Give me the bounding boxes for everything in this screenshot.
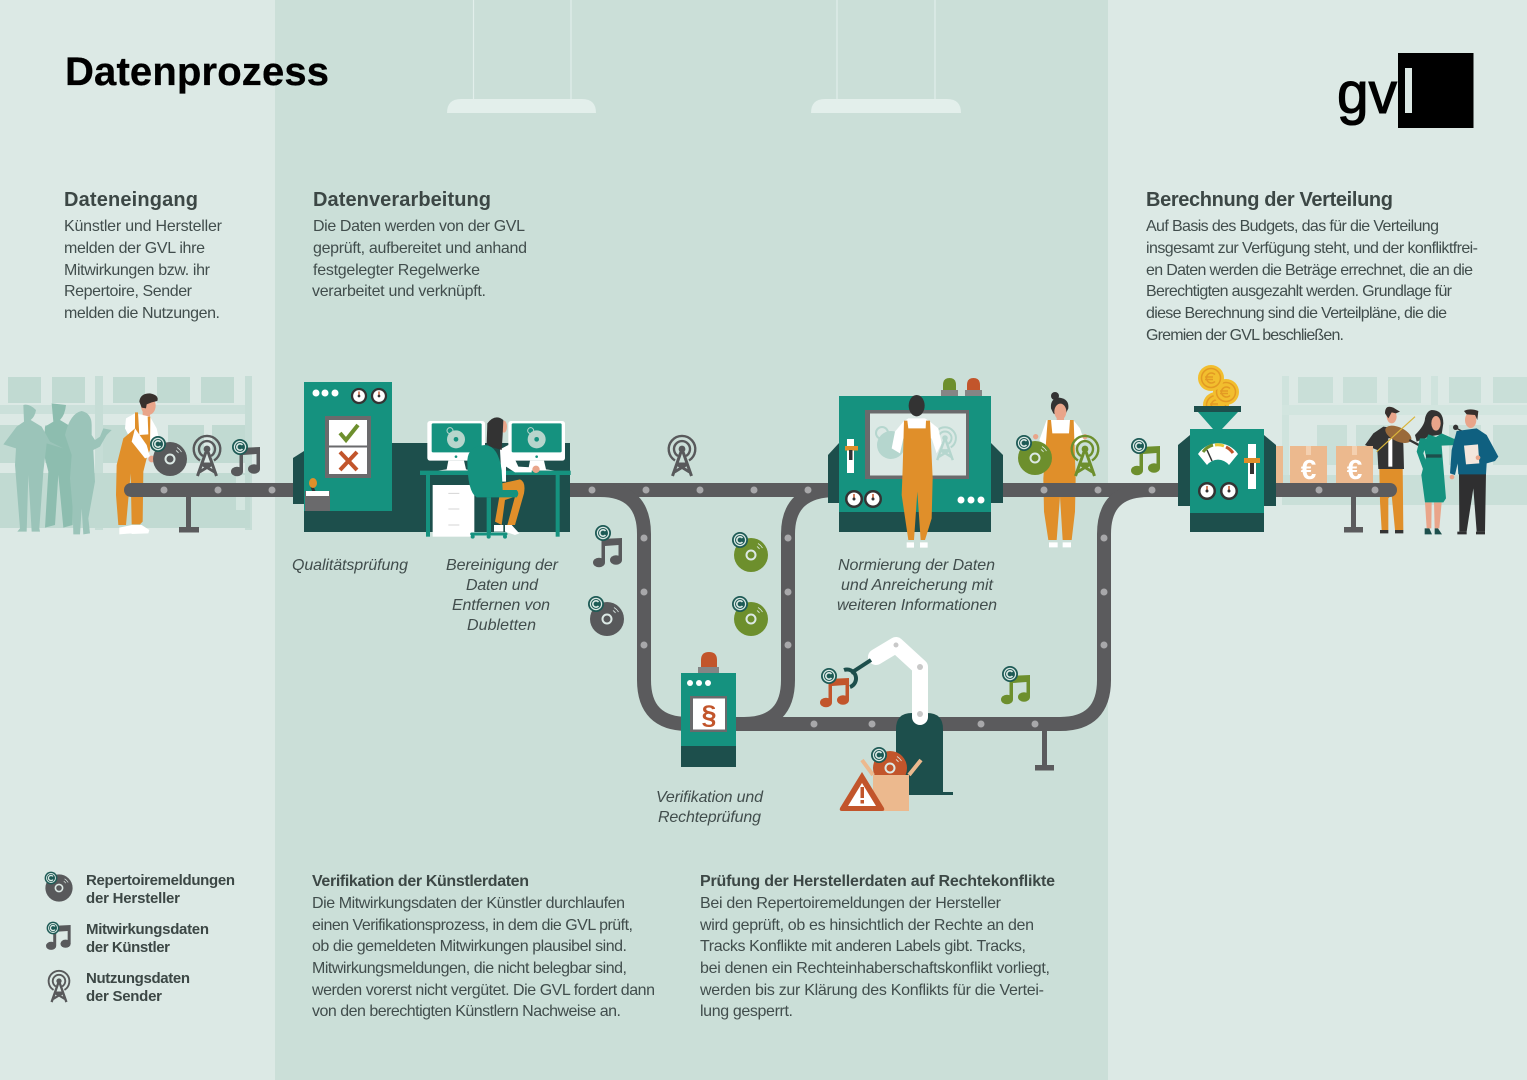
icon: CD on belt xyxy=(150,436,187,476)
legend item: Repertoiremeldungen xyxy=(45,872,235,907)
text block: Berechnung der Verteilung: Gremien der GVL beschließen. xyxy=(1146,327,1344,344)
legend item: Mitwirkungsdaten xyxy=(46,921,209,956)
icon: note on belt xyxy=(231,439,260,476)
artists silhouettes xyxy=(3,403,112,534)
text block: Dateneingang: melden die Nutzungen. xyxy=(64,305,220,322)
text block: Berechnung der Verteilung: en Daten werden die Beträge errechnet, die an die xyxy=(1146,262,1473,279)
text block: Verifikation der Künstlerdaten: von den berechtigten Künstlern Nachweise an. xyxy=(312,1003,621,1020)
background: central process hall xyxy=(275,0,1108,1080)
text block: Prüfung der Herstellerdaten: Tracks Konflikte mit anderen Labels gibt. Tracks, xyxy=(700,938,1026,955)
text block: Berechnung der Verteilung: Berechtigten ausgezahlt werden. Grundlage für xyxy=(1146,283,1453,300)
text block: Verifikation der Künstlerdaten: werden vorerst nicht vergütet. Die GVL fordert dann xyxy=(311,982,655,999)
label: Bereinigung: Dubletten xyxy=(467,617,536,634)
text block: Dateneingang: Dateneingang xyxy=(64,189,198,211)
euro boxes on belt: € xyxy=(1347,454,1363,485)
text block: Prüfung der Herstellerdaten: Prüfung der Herstellerdaten auf Rechtekonflikte xyxy=(700,873,1055,890)
warehouse shelves left xyxy=(0,376,252,530)
label: Normierung: Normierung der Daten xyxy=(838,557,995,574)
logo gvl: gv xyxy=(1337,61,1397,126)
conveyor rollers xyxy=(160,486,1378,728)
legend item: Mitwirkungsdaten: der Künstler xyxy=(86,939,170,956)
operator at normalisation machine xyxy=(892,395,942,548)
text block: Verifikation der Künstlerdaten xyxy=(311,873,655,1020)
payout machine with coins xyxy=(1178,365,1276,532)
icon: green note xyxy=(1131,438,1160,475)
text block: Datenverarbeitung: Datenverarbeitung xyxy=(313,189,491,211)
text block: Verifikation der Künstlerdaten: ob die gemeldeten Mitwirkungen plausibel sind. xyxy=(312,938,627,955)
man with clipboard xyxy=(1450,409,1498,534)
label: Bereinigung: Bereinigung der xyxy=(446,557,559,574)
logo gvl xyxy=(1337,53,1474,128)
label: Bereinigung: Entfernen von xyxy=(452,597,550,614)
text block: Datenverarbeitung xyxy=(312,189,527,300)
text block: Verifikation der Künstlerdaten: Verifikation der Künstlerdaten xyxy=(312,873,529,890)
robot arm xyxy=(844,642,953,795)
conveyor belt network xyxy=(131,490,1390,724)
label: Bereinigung xyxy=(446,557,559,634)
text block: Verifikation der Künstlerdaten: Die Mitwirkungsdaten der Künstler durchlaufen xyxy=(312,895,625,912)
text block: Datenverarbeitung: geprüft, aufbereitet und anhand xyxy=(313,240,527,257)
icon: tower on belt xyxy=(194,436,220,476)
legend item: Mitwirkungsdaten: Mitwirkungsdaten xyxy=(86,921,209,938)
ceiling lamp left xyxy=(447,0,596,113)
icon: orange note xyxy=(820,668,849,707)
conveyor stands xyxy=(179,497,1363,770)
text block: Berechnung der Verteilung: Auf Basis des Budgets, das für die Verteilung xyxy=(1146,218,1439,235)
text block: Prüfung der Herstellerdaten: werden bis zur Klärung des Konflikts für die Vertei- xyxy=(699,982,1044,999)
machine: legal verification xyxy=(681,652,736,767)
legend item: Repertoiremeldungen: Repertoiremeldungen xyxy=(86,872,235,889)
legend item: Nutzungsdaten: Nutzungsdaten xyxy=(86,970,190,987)
text block: Verifikation der Künstlerdaten: einen Verifikationsprozess, in dem die GVL prüft, xyxy=(312,917,633,934)
text block: Prüfung der Herstellerdaten: Bei den Repertoiremeldungen der Hersteller xyxy=(700,895,1002,912)
machine: quality check xyxy=(293,382,570,532)
text block: Berechnung der Verteilung xyxy=(1146,189,1478,344)
label: Normierung xyxy=(837,557,997,614)
text block: Datenverarbeitung: festgelegter Regelwerke xyxy=(313,262,480,279)
machine: normalisation xyxy=(828,378,1003,532)
text block: Dateneingang: Mitwirkungen bzw. ihr xyxy=(64,262,211,279)
legend item: Nutzungsdaten xyxy=(49,970,190,1005)
woman singer xyxy=(1415,410,1462,534)
icon: grey CD xyxy=(588,596,624,636)
label: Verifikation: Verifikation und xyxy=(656,789,764,806)
euro boxes on belt xyxy=(1276,446,1373,485)
label: Verifikation: Rechteprüfung xyxy=(658,809,761,826)
worker with CD and tower (behind belt) xyxy=(1033,392,1088,547)
label: Normierung: und Anreicherung mit xyxy=(841,577,994,594)
text block: Prüfung der Herstellerdaten: bei denen ein Rechteinhaberschaftskonflikt vorliegt, xyxy=(700,960,1050,977)
text block: Prüfung der Herstellerdaten: wird geprüft, ob es hinsichtlich der Rechte an den xyxy=(699,917,1034,934)
label: Bereinigung: Daten und xyxy=(466,577,539,594)
icon: grey note xyxy=(593,525,622,567)
icon: green note lower xyxy=(1001,666,1030,704)
worker left holding CD xyxy=(116,393,160,534)
ceiling lamp right xyxy=(811,0,961,113)
icon: green CD lower xyxy=(732,596,768,636)
violinist xyxy=(1365,407,1425,533)
legend item: Repertoiremeldungen: der Hersteller xyxy=(86,890,180,907)
text block: Verifikation der Künstlerdaten: Mitwirkungsmeldungen, die nicht belegbar sind, xyxy=(312,960,627,977)
text block: Berechnung der Verteilung: diese Berechnung sind die Verteilpläne, die die xyxy=(1146,305,1447,322)
label: Verifikation xyxy=(656,789,764,826)
legend xyxy=(45,872,235,1005)
legend item: Nutzungsdaten: der Sender xyxy=(86,988,162,1005)
machine: legal verification: § xyxy=(701,700,717,730)
icon: tower mid belt xyxy=(669,436,695,476)
text block: Datenverarbeitung: Die Daten werden von der GVL xyxy=(313,218,525,235)
icons carried by worker xyxy=(1016,435,1098,476)
text block: Berechnung der Verteilung: insgesamt zur Verfügung steht, und der konfliktfrei- xyxy=(1146,240,1478,257)
text block: Prüfung der Herstellerdaten xyxy=(699,873,1055,1020)
text block: Datenverarbeitung: verarbeitet und verknüpft. xyxy=(312,283,486,300)
label: Normierung: weiteren Informationen xyxy=(837,597,997,614)
rejected box with CD and warning xyxy=(840,747,921,811)
label: Qualitätsprüfung: Qualitätsprüfung xyxy=(292,557,408,574)
text block: Berechnung der Verteilung: Berechnung der Verteilung xyxy=(1146,189,1393,211)
workstation: data cleaning with monitors and operator xyxy=(420,417,571,539)
text block: Dateneingang: Künstler und Hersteller xyxy=(64,218,223,235)
icon: green CD upper xyxy=(732,532,768,572)
text block: Dateneingang: Repertoire, Sender xyxy=(64,283,193,300)
warehouse shelves right xyxy=(1282,376,1527,505)
text block: Prüfung der Herstellerdaten: lung gesperrt. xyxy=(700,1003,793,1020)
euro boxes on belt: € xyxy=(1301,454,1317,485)
title: Datenprozess xyxy=(65,50,329,94)
text block: Dateneingang: melden der GVL ihre xyxy=(64,240,205,257)
text block: Dateneingang xyxy=(64,189,223,322)
